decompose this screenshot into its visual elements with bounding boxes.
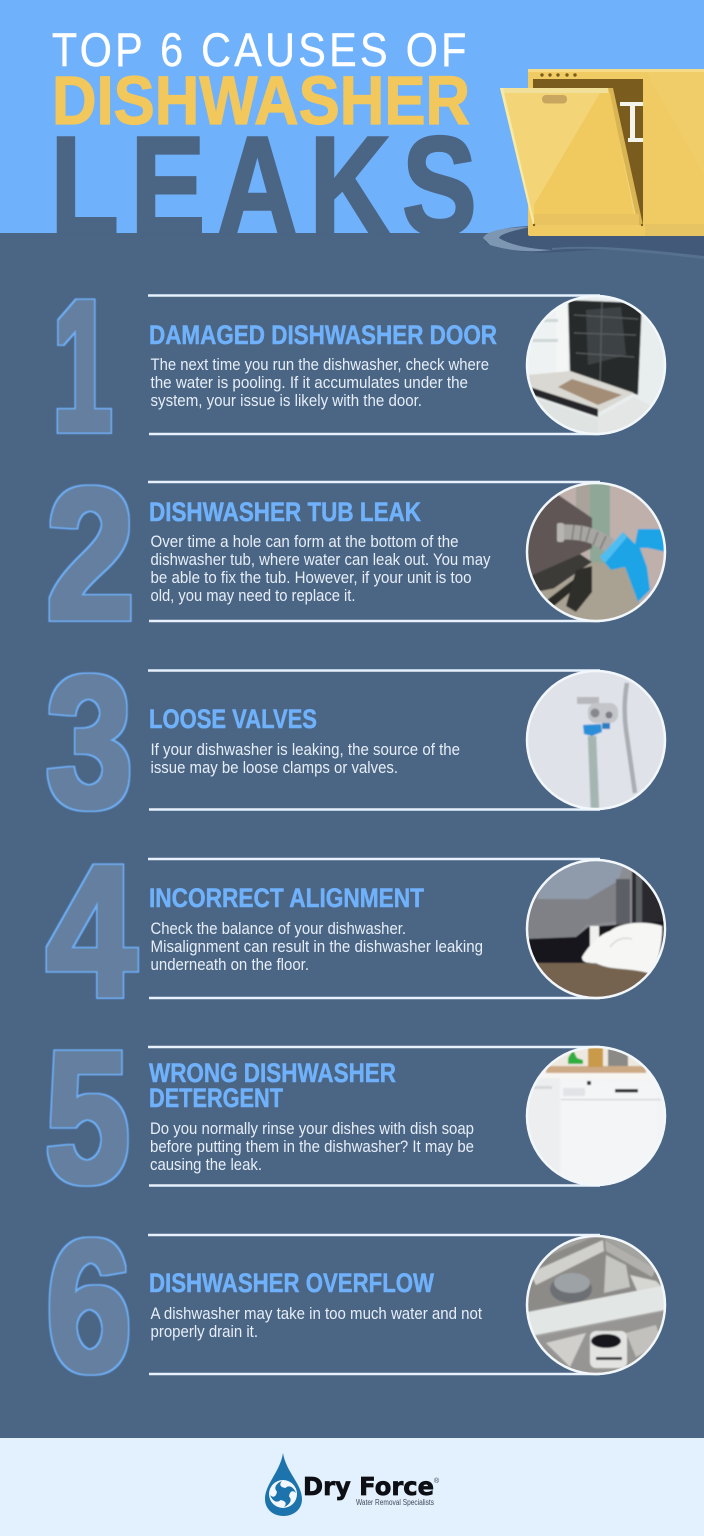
cause 3 — [46, 669, 666, 813]
description: issue may be loose clamps or valves. — [150, 759, 398, 777]
description: Check the balance of your dishwasher. — [150, 920, 406, 938]
number 5: 5 — [46, 1012, 130, 1222]
description — [150, 1120, 474, 1174]
description — [150, 741, 460, 777]
heading: DISHWASHER OVERFLOW — [149, 1268, 434, 1298]
photo: drain hose and blue pipe — [526, 482, 666, 622]
description: be able to fix the tub. However, if your unit is too — [150, 569, 472, 587]
photo: misaligned feet and towel — [526, 859, 666, 999]
heading: WRONG DISHWASHER — [149, 1058, 396, 1088]
icon: water drop with swirl — [265, 1453, 302, 1516]
heading: INCORRECT ALIGNMENT — [149, 883, 424, 913]
description: If your dishwasher is leaking, the source of the — [150, 741, 460, 759]
heading — [149, 1058, 396, 1113]
photo: white dishwasher — [526, 1046, 666, 1186]
footer background — [0, 1438, 704, 1536]
cause 6 — [48, 1234, 666, 1376]
divider lines — [148, 1235, 600, 1374]
divider lines — [148, 1047, 600, 1186]
logo: Dry Force — [265, 1453, 440, 1516]
title — [50, 25, 477, 264]
body background — [0, 233, 704, 1439]
description: causing the leak. — [150, 1156, 262, 1174]
cause 4 — [44, 858, 666, 1000]
number 1: 1 — [54, 262, 112, 470]
title line: top 6 causes of: TOP 6 CAUSES OF — [52, 25, 466, 77]
description: Do you normally rinse your dishes with dish soap — [150, 1120, 474, 1138]
tagline: Water Removal Specialists — [356, 1498, 434, 1507]
heading: DAMAGED DISHWASHER DOOR — [149, 320, 497, 350]
photo: valve and blue clamp — [526, 670, 666, 810]
description: dishwasher tub, where water can leak out. You may — [150, 551, 491, 569]
photo: dishwasher tub interior — [520, 1235, 672, 1375]
divider lines — [148, 670, 600, 810]
number 3: 3 — [46, 638, 132, 846]
description: before putting them in the dishwasher? It may be — [150, 1138, 474, 1156]
wordmark: Dry Force — [303, 1472, 434, 1501]
description: The next time you run the dishwasher, check where — [150, 356, 489, 374]
description — [150, 356, 489, 410]
description: underneath on the floor. — [150, 956, 309, 974]
number 6: 6 — [46, 1202, 132, 1410]
photo: open dishwasher door — [526, 295, 666, 435]
illustration: open dishwasher with water puddle — [483, 69, 704, 259]
heading: DISHWASHER TUB LEAK — [149, 497, 421, 527]
description: Over time a hole can form at the bottom of the — [150, 533, 458, 551]
registered mark: ® — [434, 1477, 440, 1485]
cause 1 — [54, 262, 666, 470]
description: Misalignment can result in the dishwasher leaking — [150, 938, 483, 956]
title line: leaks: LEAKS — [50, 107, 477, 264]
description: properly drain it. — [150, 1323, 258, 1341]
description — [150, 533, 491, 605]
divider lines — [148, 482, 600, 621]
number 4: 4 — [46, 826, 136, 1036]
description — [150, 920, 483, 974]
heading: DETERGENT — [149, 1083, 283, 1113]
description: the water is pooling. If it accumulates under the — [150, 374, 468, 392]
cause 5 — [46, 1046, 666, 1188]
description: A dishwasher may take in too much water and not — [150, 1305, 482, 1323]
header background — [0, 0, 704, 234]
divider lines — [148, 859, 600, 998]
description: system, your issue is likely with the door. — [150, 392, 422, 410]
heading: LOOSE VALVES — [149, 704, 317, 734]
number 2: 2 — [46, 450, 134, 658]
divider lines — [148, 296, 600, 434]
description: old, you may need to replace it. — [150, 587, 356, 605]
cause 2 — [48, 480, 666, 623]
description — [150, 1305, 482, 1341]
title line: dishwasher: DISHWASHER — [52, 62, 470, 139]
